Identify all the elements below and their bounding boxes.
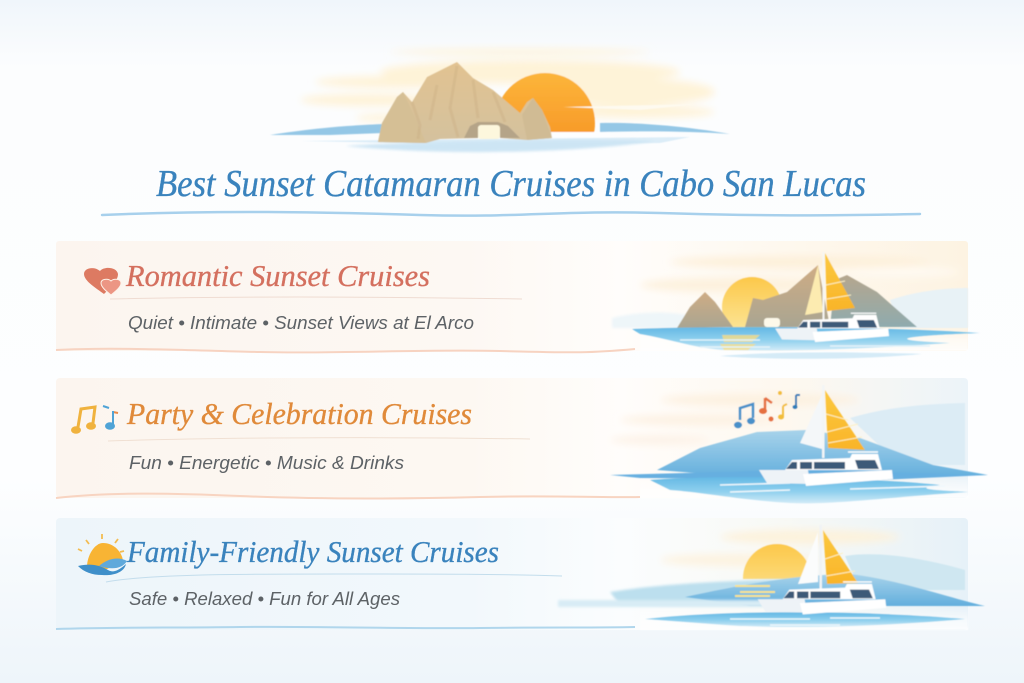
main sail [825, 390, 865, 450]
icon: hearts [84, 268, 121, 295]
wave accent [56, 494, 640, 498]
icon: sun over waves [78, 534, 127, 575]
panel: family-friendly sunset cruises [56, 518, 985, 630]
wave accent [56, 627, 635, 629]
catamaran hull [775, 313, 889, 342]
tagline: Safe • Relaxed • Fun for All Ages [129, 589, 400, 609]
hero illustration: El Arco at sunset [270, 49, 730, 182]
title wave underline [102, 212, 920, 216]
catamaran hull [759, 452, 893, 486]
jib sail [798, 532, 818, 584]
heading: Family-Friendly Sunset Cruises [126, 534, 499, 569]
icon: floating music notes [734, 391, 800, 428]
illustration: sun and catamaran [558, 525, 985, 630]
heading: Party & Celebration Cruises [126, 396, 472, 431]
heading: Romantic Sunset Cruises [125, 258, 430, 293]
jib sail [805, 265, 823, 315]
icon: music notes [71, 406, 118, 434]
catamaran hull [758, 582, 886, 615]
jib sail [800, 395, 822, 449]
tagline: Quiet • Intimate • Sunset Views at El Arco [128, 313, 474, 333]
tagline: Fun • Energetic • Music & Drinks [129, 453, 404, 473]
illustration: rocks and catamaran [612, 252, 980, 359]
main sail [823, 530, 858, 584]
wave accent [56, 349, 635, 352]
panel: romantic sunset cruises [56, 241, 980, 359]
illustration: catamaran and music [610, 385, 988, 503]
title: Best Sunset Catamaran Cruises in Cabo San Lucas [156, 163, 866, 205]
panel: party and celebration cruises [56, 378, 988, 503]
main sail [825, 253, 855, 311]
